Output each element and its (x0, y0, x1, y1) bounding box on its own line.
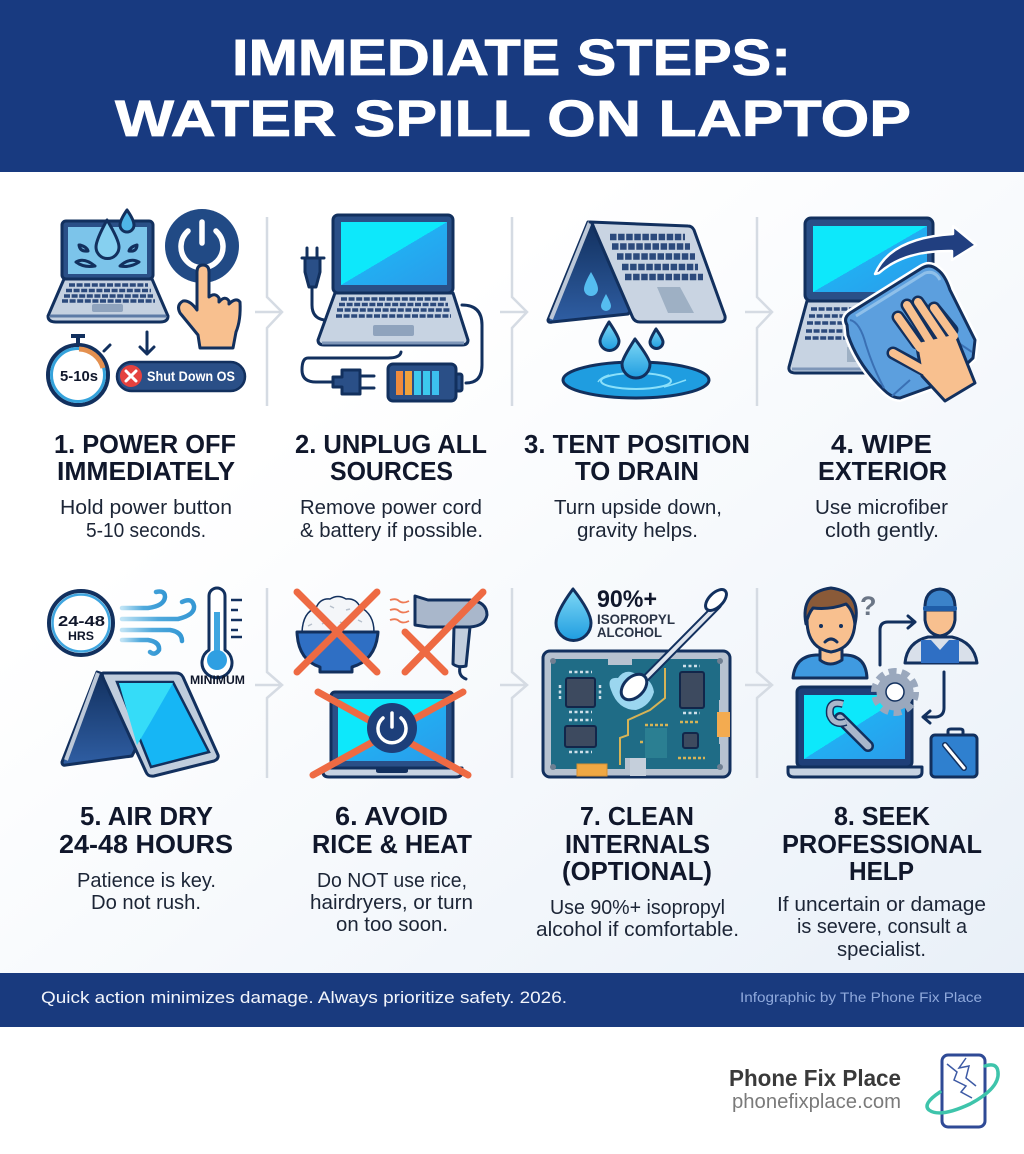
icon: clock 24-48 hrs: HRS (68, 631, 94, 643)
icon: rice bowl crossed out (297, 592, 378, 672)
heading: IMMEDIATELY (57, 458, 235, 486)
heading (295, 431, 487, 486)
icon: thermometer (202, 588, 242, 678)
icon: toolbox (931, 729, 977, 777)
body text: on too soon. (336, 913, 448, 936)
body text (60, 496, 232, 542)
heading: 4. WIPE (831, 431, 932, 459)
step dividers with chevrons (255, 217, 772, 778)
icon: hairdryer crossed out (390, 592, 487, 679)
body text: & battery if possible. (300, 519, 483, 542)
logo (729, 1055, 998, 1127)
body text (300, 496, 483, 542)
title: IMMEDIATE STEPS: (232, 29, 791, 86)
body text (77, 869, 216, 914)
body text: specialist. (837, 938, 926, 961)
icon: swipe arrow (875, 226, 976, 274)
icon: air flow (122, 592, 194, 654)
label: 90%+ isopropyl alcohol (597, 586, 675, 640)
icon: laptop with wrench (788, 687, 922, 777)
body text: If uncertain or damage (777, 893, 986, 916)
icon: alcohol drop (556, 589, 591, 640)
icon: laptop in tent position (548, 222, 725, 322)
icon: wet laptop (48, 210, 168, 322)
panel: step 2 unplug (295, 215, 487, 542)
heading: RICE & HEAT (312, 831, 472, 859)
logo wordmark (729, 1065, 901, 1113)
label: minimum: MINIMUM (190, 675, 245, 687)
icon: clock 24-48 hrs (49, 591, 113, 655)
body text: Use microfiber (815, 496, 948, 519)
heading (562, 803, 712, 886)
body text (815, 496, 948, 542)
label: 90%+ isopropyl alcohol: ISOPROPYL (597, 612, 675, 627)
logo wordmark: Phone Fix Place (729, 1065, 901, 1091)
label: 90%+ isopropyl alcohol: ALCOHOL (597, 625, 662, 640)
body text: Use 90%+ isopropyl (550, 896, 725, 919)
heading (312, 803, 472, 859)
body text: is severe, consult a (797, 915, 968, 938)
heading (59, 803, 233, 859)
body text (310, 869, 473, 936)
heading: 2. UNPLUG ALL (295, 431, 487, 459)
header banner (0, 0, 1024, 172)
body text: Hold power button (60, 496, 232, 519)
panel: step 3 tent position (524, 222, 750, 542)
icon: laptop power crossed out (313, 692, 468, 777)
title: WATER SPILL ON LAPTOP (115, 90, 911, 147)
heading: 1. POWER OFF (54, 431, 236, 459)
body text: 5-10 seconds. (86, 519, 206, 542)
arrows: escalation flow (880, 616, 944, 723)
icon: arrow down (140, 332, 154, 354)
icon: technician (905, 589, 977, 663)
panel: step 5 air dry (49, 588, 245, 914)
icon: laptop (318, 215, 468, 345)
heading (782, 803, 982, 886)
panel: step 1 power off (48, 209, 245, 542)
heading: 6. AVOID (335, 803, 448, 831)
heading: 8. SEEK (834, 803, 931, 831)
body text: cloth gently. (825, 519, 939, 542)
body text: gravity helps. (577, 519, 698, 542)
icon: laptop being wiped (789, 218, 933, 373)
heading: 3. TENT POSITION (524, 431, 750, 459)
body text: alcohol if comfortable. (536, 918, 739, 941)
panel: step 7 clean internals (536, 586, 739, 941)
icon: cloth and hand (846, 266, 975, 401)
heading: HELP (849, 858, 914, 886)
panel: step 8 seek professional help (777, 588, 986, 961)
body text (777, 893, 986, 961)
heading (524, 431, 750, 486)
icon: worried user (793, 588, 876, 678)
icon: wall plug and cord (302, 248, 324, 320)
heading (818, 431, 947, 486)
logo icon: cracked phone with ring (927, 1055, 998, 1127)
icon: circuit board (543, 651, 730, 777)
body text (554, 496, 722, 542)
status pill: shut down OS (117, 362, 245, 391)
body text: Turn upside down, (554, 496, 722, 519)
icon: battery (388, 305, 482, 401)
label: 90%+ isopropyl alcohol: 90%+ (597, 586, 657, 613)
heading: (OPTIONAL) (562, 858, 712, 886)
body text: Remove power cord (300, 496, 482, 519)
icon: loose cord and plug (302, 352, 401, 394)
icon: stopwatch 5-10s: 5-10s (60, 368, 98, 385)
icon: cotton swab (610, 586, 730, 710)
panel: step 4 wipe exterior (789, 218, 976, 542)
icon: gear (874, 671, 916, 713)
title (115, 29, 911, 147)
icon: stopwatch 5-10s (48, 334, 110, 405)
footer credit: Infographic by The Phone Fix Place (740, 990, 982, 1005)
heading (54, 431, 236, 486)
heading: 7. CLEAN (580, 803, 694, 831)
icon: clock 24-48 hrs: 24-48 (58, 613, 105, 630)
body text (536, 896, 739, 941)
body text: Do not rush. (91, 891, 201, 914)
body text: Patience is key. (77, 869, 216, 892)
body text: hairdryers, or turn (310, 891, 473, 914)
heading: TO DRAIN (575, 458, 699, 486)
footer note: Quick action minimizes damage. Always prioritize safety. 2026. (41, 988, 567, 1007)
icon: tented laptop screen (62, 672, 218, 776)
icon: power button pressed by hand (165, 209, 240, 348)
status pill: shut down OS: Shut Down OS (147, 369, 235, 384)
heading: 24-48 HOURS (59, 831, 233, 859)
heading: EXTERIOR (818, 458, 947, 486)
panel: step 6 avoid rice and heat (297, 592, 487, 936)
heading: INTERNALS (565, 831, 710, 859)
heading: PROFESSIONAL (782, 831, 982, 859)
footer banner (0, 973, 1024, 1027)
body text: Do NOT use rice, (317, 869, 467, 892)
heading: SOURCES (330, 458, 453, 486)
heading: 5. AIR DRY (80, 803, 213, 831)
logo wordmark: phonefixplace.com (732, 1091, 901, 1113)
icon: worried user: ? (860, 591, 876, 621)
icon: puddle with drops (563, 322, 709, 398)
